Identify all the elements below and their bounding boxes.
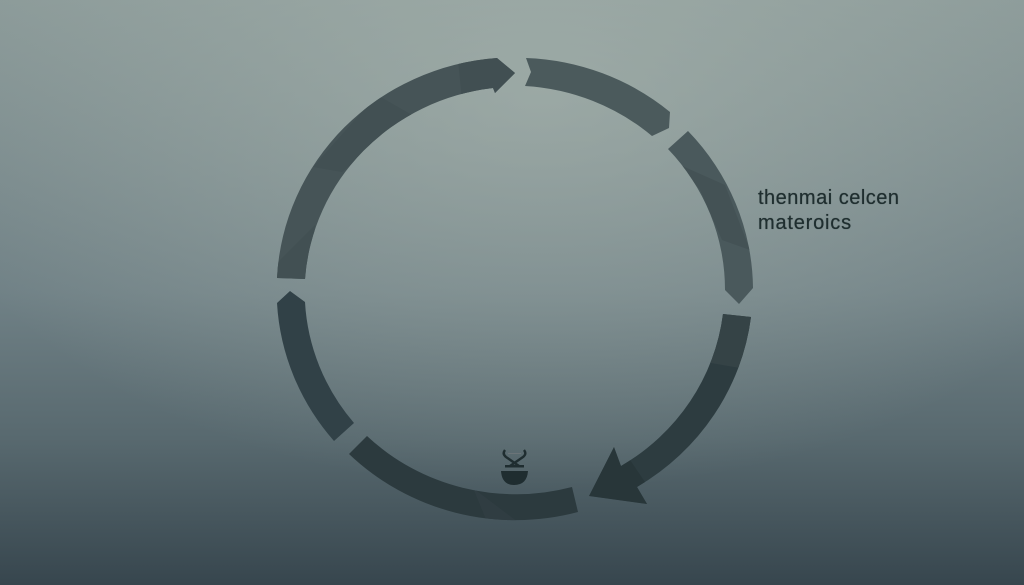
segment: left band [277, 291, 354, 441]
segment: right band [668, 131, 753, 304]
segment: lower-right arrow [589, 310, 756, 504]
text label: materoics [758, 212, 852, 234]
cycle diagram [277, 58, 753, 520]
segment: top-right band [525, 58, 670, 136]
segment: top-left arrow [277, 58, 515, 279]
segment: bottom band [349, 436, 578, 522]
text label: thenmai celcen [758, 187, 900, 209]
icon: bowl with crossed tools [501, 450, 528, 485]
